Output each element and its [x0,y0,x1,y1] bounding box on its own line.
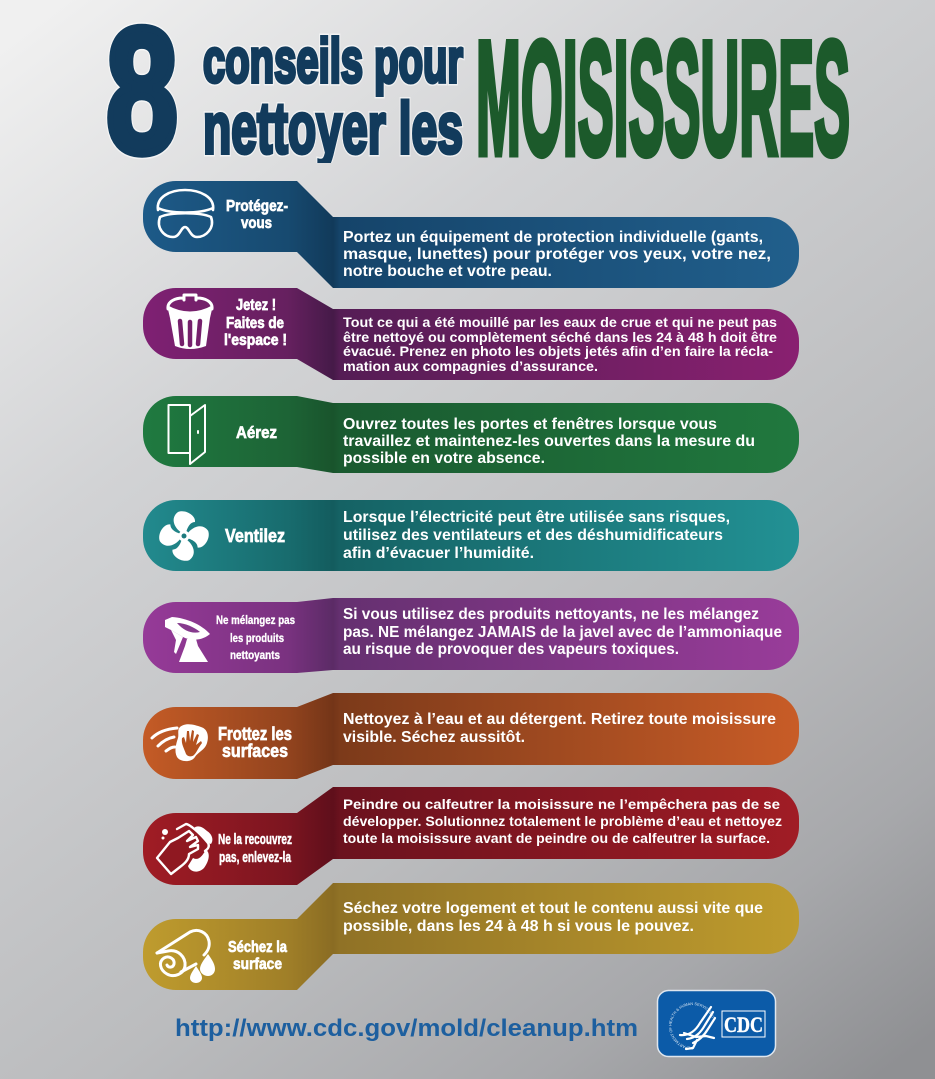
label: pas, enlevez-la [219,849,291,866]
panel: Frottez les surfaces [143,693,799,779]
panel shape [143,883,799,990]
label: nettoyants [230,648,280,662]
description: Séchez votre logement et tout le contenu aussi vite que [343,900,763,917]
label [228,939,287,973]
description: Tout ce qui a été mouillé par les eaux de crue et qui ne peut pas [343,315,777,330]
description: utilisez des ventilateurs et des déshumidificateurs [343,527,723,544]
icon: goggles [158,190,213,237]
label: Protégez- [226,198,288,215]
label: Ne la recouvrez [218,831,292,848]
label [226,198,288,232]
panel shape [143,787,799,885]
label: surface [233,956,282,973]
description: toute la moisissure avant de peindre ou de calfeutrer la surface. [343,831,770,846]
description: travaillez et maintenez-les ouvertes dans la mesure du [343,433,755,450]
icon: spray bottle [165,617,210,662]
description [343,416,755,467]
panel shape [143,396,799,473]
panel: Ne la recouvrez pas [143,787,799,885]
icon: towel and drops [157,930,215,983]
description: évacué. Prenez en photo les objets jetés afin d’en faire la récla- [343,344,773,359]
icon: hand wiping [152,724,208,761]
CDC box: CDC [724,1012,763,1037]
description: Peindre ou calfeutrer la moisissure ne l’empêchera pas de se [343,797,780,812]
eagle mark [680,1007,715,1049]
description [343,509,730,562]
icon: fan [159,511,209,561]
label: Ventilez [225,526,285,546]
heading: conseils pour nettoyer les: conseils pour [203,27,463,96]
description [343,229,771,280]
label: surfaces [222,741,288,761]
description: développer. Solutionnez totalement le problème d’eau et nettoyez [343,814,782,829]
description: masque, lunettes) pour protéger vos yeux, votre nez, [343,246,771,263]
label: Séchez la [228,939,287,956]
description [343,606,782,658]
description: être nettoyé ou complètement séché dans les 24 à 48 h doit être [343,330,777,345]
url link text: http://www.cdc.gov/mold/cleanup.htm [175,1015,638,1042]
description: Lorsque l’électricité peut être utilisée sans risques, [343,509,730,526]
panel: Ventilez [143,500,799,571]
label: Ne mélangez pas [216,613,295,627]
description: possible en votre absence. [343,450,545,467]
description [343,900,763,935]
description: mation aux compagnies d’assurance. [343,359,598,374]
description [343,797,782,846]
label: vous [241,215,272,232]
icon: open door [168,405,205,464]
description: afin d’évacuer l’humidité. [343,545,534,562]
description: possible, dans les 24 à 48 h si vous le pouvez. [343,918,694,935]
label: Faites de [226,315,284,332]
description: Ouvrez toutes les portes et fenêtres lorsque vous [343,416,717,433]
title [106,22,850,163]
panel shape [143,693,799,779]
label [218,831,292,866]
description: Si vous utilisez des produits nettoyants, ne les mélangez [343,606,759,623]
label: les produits [230,631,284,645]
panel shape [143,288,799,380]
description: Nettoyez à l’eau et au détergent. Retirez toute moisissure [343,711,776,728]
label: l'espace ! [224,332,287,349]
heading: conseils pour nettoyer les [203,27,463,169]
label: Frottez les [218,724,292,744]
panel: Protégez-vous [143,181,799,288]
seal text: DEPARTMENT OF HEALTH & HUMAN SERVICES USA [668,1002,714,1050]
heading: conseils pour nettoyer les: nettoyer les [203,89,463,169]
description [343,711,776,746]
panel: Jetez [143,288,799,380]
logo background [658,990,776,1056]
label [216,613,295,662]
panel shape [143,500,799,571]
panel shape [143,181,799,288]
panel shape [143,598,799,673]
label [224,297,287,349]
heading: conseils pour nettoyer les: nettoyer les [203,89,463,169]
heading: conseils pour nettoyer les: conseils pour [203,27,463,96]
panel: Aérez [143,396,799,473]
icon: trash can [167,295,213,349]
description: pas. NE mélangez JAMAIS de la javel avec de l’ammoniaque [343,624,782,641]
label [218,724,292,761]
label: Aérez [236,423,277,442]
panel: Ne mélangez pas [143,598,799,673]
description: notre bouche et votre peau. [343,263,552,280]
panel: Séchez la surface [143,883,799,990]
label: Jetez ! [236,297,276,314]
description: visible. Séchez aussitôt. [343,729,525,746]
description: Portez un équipement de protection individuelle (gants, [343,229,763,246]
description: au risque de provoquer des vapeurs toxiques. [343,641,679,658]
description [343,315,777,374]
icon: hand with sponge [157,824,212,874]
